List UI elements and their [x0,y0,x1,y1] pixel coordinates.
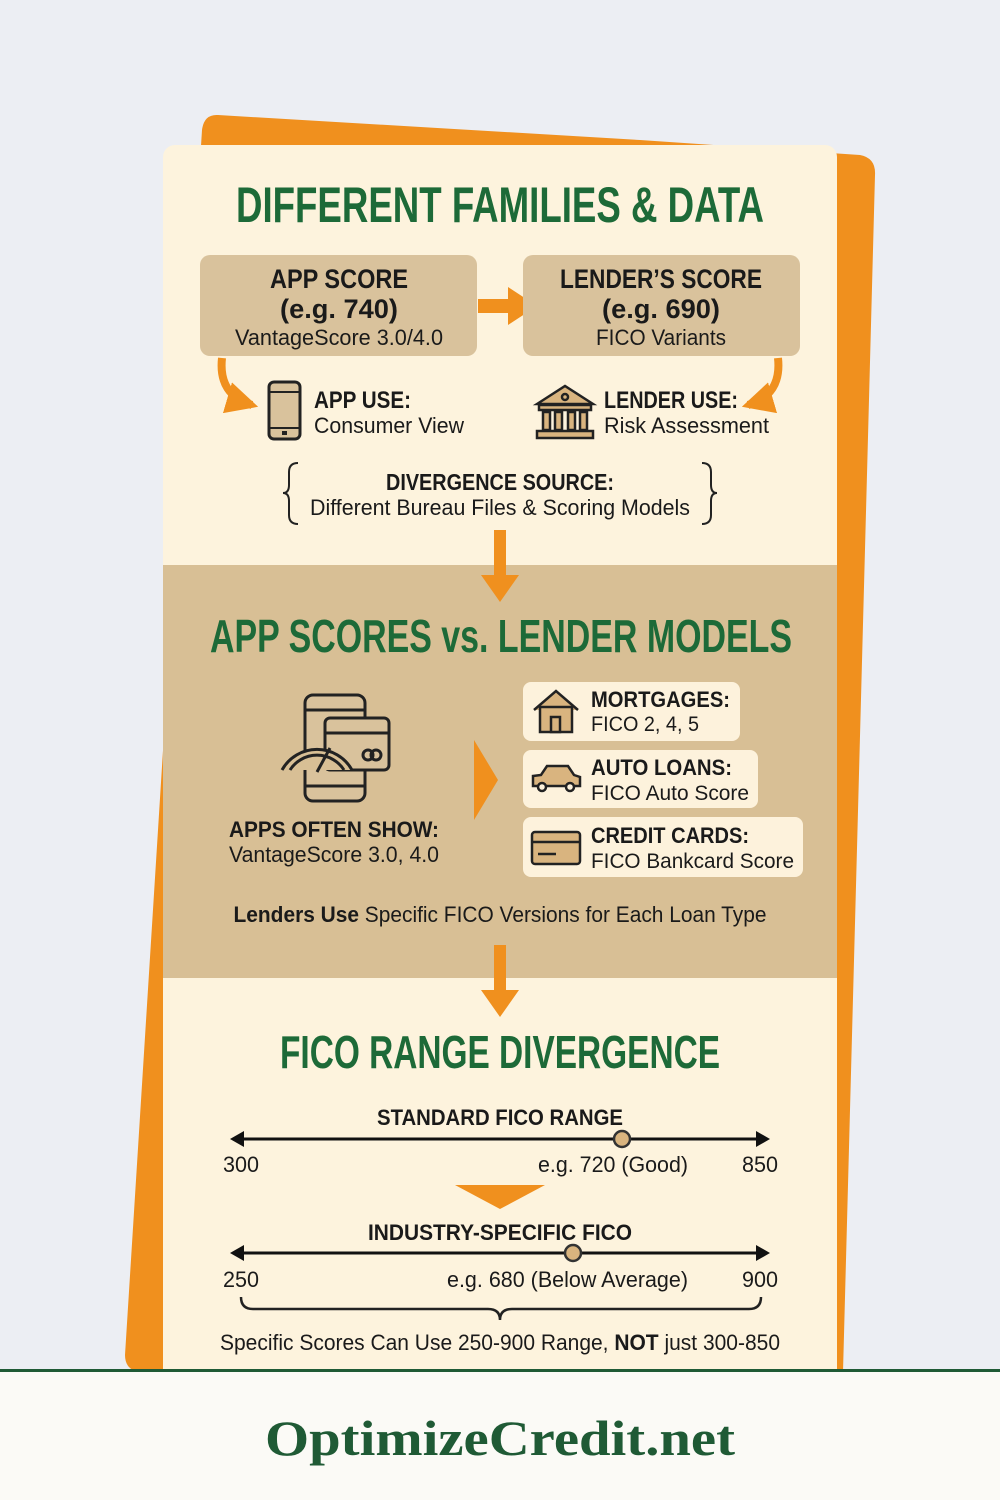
standard fico range scale: STANDARD FICO RANGE [377,1105,623,1130]
pill: credit cards: FICO Bankcard Score [591,850,794,873]
bottom caption: Specific Scores Can Use 250-900 Range, NOT just 300-850 [220,1330,780,1355]
lender use text [604,387,769,438]
title 3: FICO RANGE DIVERGENCE [280,1026,720,1078]
down triangle [455,1185,545,1209]
standard fico range scale [223,1105,778,1177]
pill: auto loans: AUTO LOANS: [591,755,732,780]
apps often show text: VantageScore 3.0, 4.0 [229,842,439,867]
curved arrow left [222,358,252,405]
pill: mortgages: MORTGAGES: [591,687,730,712]
industry-specific fico scale [223,1220,778,1292]
box: lender score: LENDER’S SCORE [560,264,762,294]
footer [0,1369,1000,1500]
range brace [241,1297,761,1320]
apps often show text: APPS OFTEN SHOW: [229,817,439,842]
industry-specific fico scale: INDUSTRY-SPECIFIC FICO [368,1220,632,1245]
app use text [314,387,464,438]
curved arrow right [748,358,778,405]
pill: auto loans [523,750,758,808]
title 1: DIFFERENT FAMILIES & DATA [236,177,764,233]
box: app score: VantageScore 3.0/4.0 [235,325,443,350]
divergence source with braces: DIVERGENCE SOURCE: [386,469,614,495]
box: app score [200,255,477,356]
box: lender score: FICO Variants [596,325,726,350]
section 3: fico range divergence [220,1026,780,1355]
apps often show text [229,817,439,867]
industry-specific fico scale: e.g. 680 (Below Average) [447,1267,688,1292]
lender use text: Risk Assessment [604,413,769,438]
pill: auto loans: FICO Auto Score [591,782,749,805]
standard fico range scale: e.g. 720 (Good) [538,1152,688,1177]
arrow down 2 [481,945,519,1017]
pill: credit cards [523,817,803,877]
box: lender score [523,255,800,356]
section 2: app scores vs lender models [163,530,837,978]
icon: phone [269,382,300,439]
footer: OptimizeCredit.net [265,1410,735,1466]
main cream card [163,145,837,1385]
standard fico range scale: 850 [742,1152,778,1177]
app use text: APP USE: [314,387,411,414]
lender use text: LENDER USE: [604,387,738,414]
icon: bank [537,386,593,438]
arrow right triangle [474,740,498,820]
box: app score: (e.g. 740) [280,294,398,324]
box: app score: APP SCORE [270,264,408,294]
divergence source with braces: Different Bureau Files & Scoring Models [310,495,690,520]
box: lender score: (e.g. 690) [602,294,720,324]
industry-specific fico scale: 250 [223,1267,259,1292]
app use text: Consumer View [314,413,464,438]
pill: credit cards: CREDIT CARDS: [591,823,749,848]
pill: mortgages: FICO 2, 4, 5 [591,713,699,736]
icon: phone with card and gauge [282,695,389,801]
industry-specific fico scale: 900 [742,1267,778,1292]
lenders use caption: Lenders Use Specific FICO Versions for Each Loan Type [234,902,766,927]
pill: mortgages [523,682,740,741]
title 2: APP SCORES vs. LENDER MODELS [210,610,792,662]
arrow: app to lender [478,287,537,325]
orange backing card [125,115,875,1372]
standard fico range scale: 300 [223,1152,259,1177]
section 1: different families [200,177,800,524]
divergence source with braces [283,463,717,524]
arrow down 1 [481,530,519,602]
